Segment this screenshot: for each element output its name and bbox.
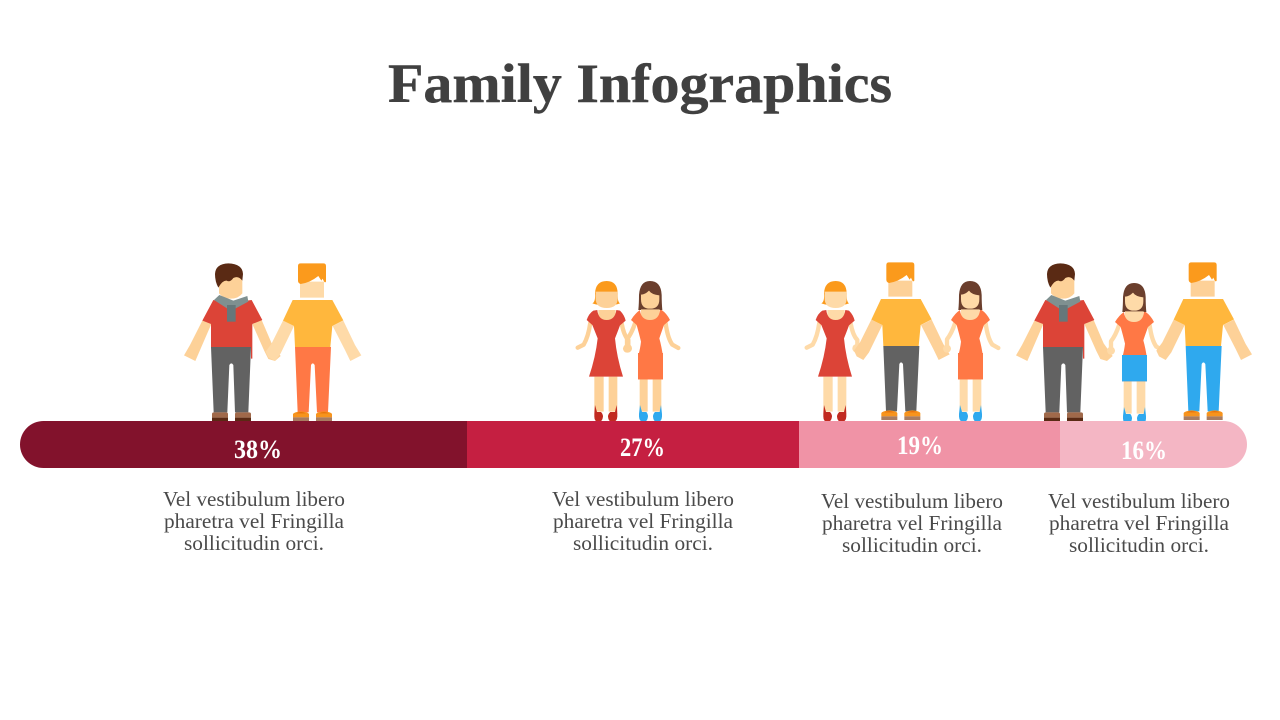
family group 1: two men xyxy=(184,263,361,421)
text block: 38% description: pharetra vel Fringilla xyxy=(164,509,345,533)
family group 2: two women xyxy=(578,281,678,422)
value 19%: 19% xyxy=(897,431,943,460)
value 38%: 38% xyxy=(234,435,282,464)
text block: 27% description: pharetra vel Fringilla xyxy=(553,509,734,533)
value 27%: 27% xyxy=(620,433,665,462)
text block: 38% description xyxy=(163,487,345,555)
text block: 19% description: Vel vestibulum libero xyxy=(821,489,1003,513)
text block: 27% description xyxy=(552,487,734,555)
figure: woman in orange dress xyxy=(623,281,678,422)
segmented percentage bar xyxy=(20,421,1247,468)
text block: 38% description: Vel vestibulum libero xyxy=(163,487,345,511)
segment 27% xyxy=(467,421,799,468)
figure: woman in red dress xyxy=(807,281,861,422)
figure: man in red shirt xyxy=(1016,263,1113,421)
text block: 27% description: Vel vestibulum libero xyxy=(552,487,734,511)
figure: woman in red dress xyxy=(578,281,632,422)
text block: 19% description: pharetra vel Fringilla xyxy=(822,511,1003,535)
figure: man in yellow shirt xyxy=(266,263,361,421)
segment 19% xyxy=(799,421,1060,468)
family group 4: two men and a girl xyxy=(1016,262,1252,424)
text block: 16% description: pharetra vel Fringilla xyxy=(1049,511,1230,535)
text block: 19% description: sollicitudin orci. xyxy=(842,533,982,557)
figure: man in yellow shirt and blue trousers xyxy=(1156,262,1252,420)
text block: 16% description xyxy=(1048,489,1230,557)
figure: girl in orange top and blue skirt xyxy=(1107,283,1162,424)
segment 38% xyxy=(20,421,467,468)
value 16%: 16% xyxy=(1121,436,1167,465)
figure: woman in orange dress xyxy=(943,281,998,422)
text block: 16% description: Vel vestibulum libero xyxy=(1048,489,1230,513)
text block: 27% description: sollicitudin orci. xyxy=(573,531,713,555)
title: Family Infographics xyxy=(388,53,892,114)
figure: man in red shirt xyxy=(184,263,281,421)
family group 3: man and two women xyxy=(807,262,998,422)
segment 16% xyxy=(1060,421,1247,468)
text block: 19% description xyxy=(821,489,1003,557)
text block: 16% description: sollicitudin orci. xyxy=(1069,533,1209,557)
figure: man in yellow shirt and grey trousers xyxy=(854,262,950,420)
text block: 38% description: sollicitudin orci. xyxy=(184,531,324,555)
